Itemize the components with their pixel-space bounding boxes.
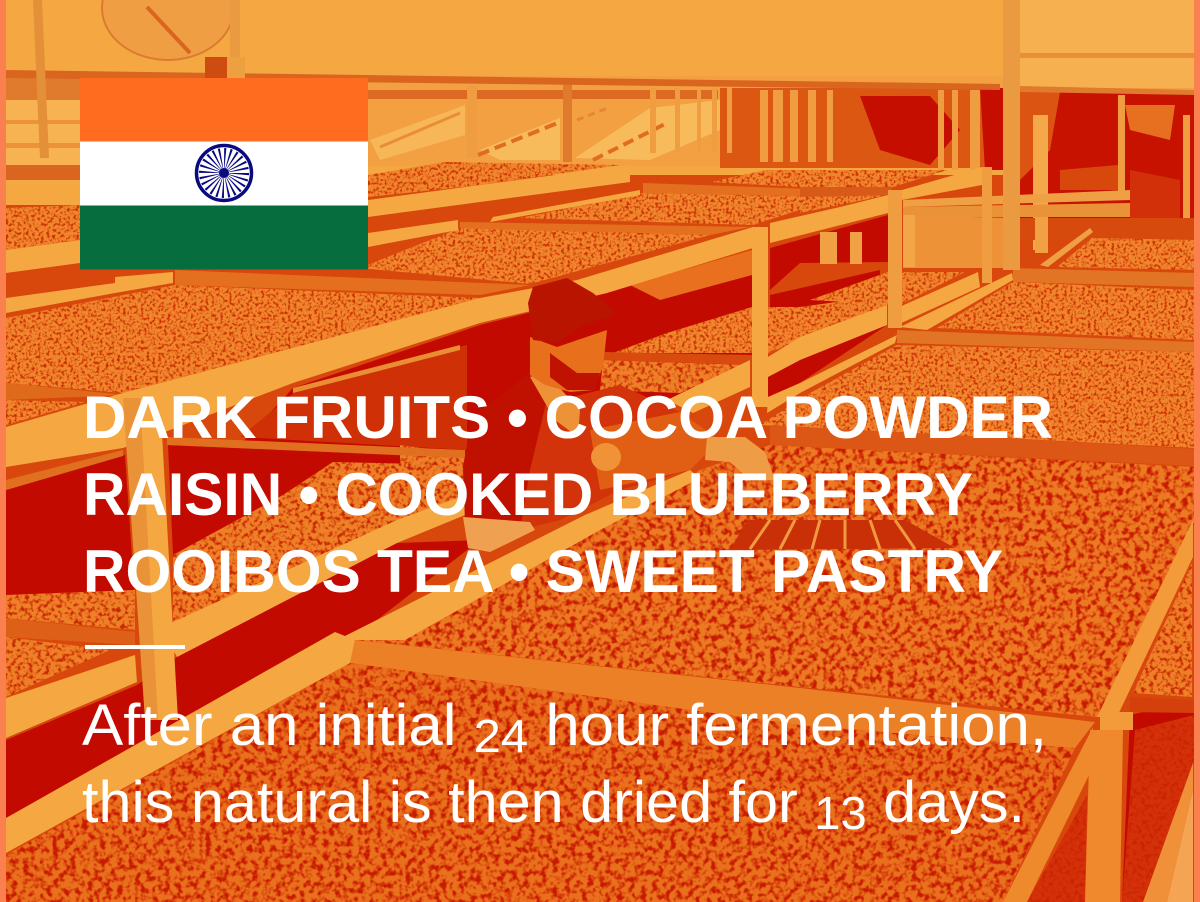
tasting notes heading: DARK FRUITS • COCOA POWDER [83,384,1053,451]
tasting notes heading: RAISIN • COOKED BLUEBERRY [83,461,973,528]
description text: this natural is then dried for [82,770,782,835]
description text: 13 [814,787,867,839]
farmer torso [463,372,720,530]
tasting notes heading [83,384,1053,605]
under-bed lit area behind the rails [240,215,1194,450]
textured coffee beds, middle [6,360,1192,697]
divider line [85,645,185,649]
far background: trees and structure [6,76,1194,250]
inner bed walls [6,165,1194,748]
description text: hour fermentation, [528,693,1047,758]
textured coffee bed, large middle [355,445,1194,717]
farmer hair [528,278,617,343]
rake [730,520,955,550]
tasting notes heading: ROOIBOS TEA • SWEET PASTRY [83,538,1003,605]
icon: Ashoka Chakra wheel [196,146,252,200]
flag of India [80,78,368,270]
farmer collar [530,372,580,437]
right border strip [1194,0,1200,902]
dark shadow areas under the beds [6,215,1194,902]
farmer right sleeve and hand [705,437,775,480]
description text [82,693,1047,839]
description text: days. [867,770,1025,835]
textured coffee beds, far [6,162,1194,448]
farmer raking coffee [463,278,955,552]
canopy and fan at top [6,0,1194,158]
farmer beard [550,353,600,390]
description text: After an initial [82,693,433,758]
farmer left sleeve [463,517,535,552]
farmer badge [591,443,621,471]
left border strip [0,0,6,902]
shaded dark beds at the right edge [1027,715,1194,902]
farmer neck and face [530,330,607,392]
textured coffee bed, front [6,663,1075,902]
description text: 24 [474,710,528,762]
